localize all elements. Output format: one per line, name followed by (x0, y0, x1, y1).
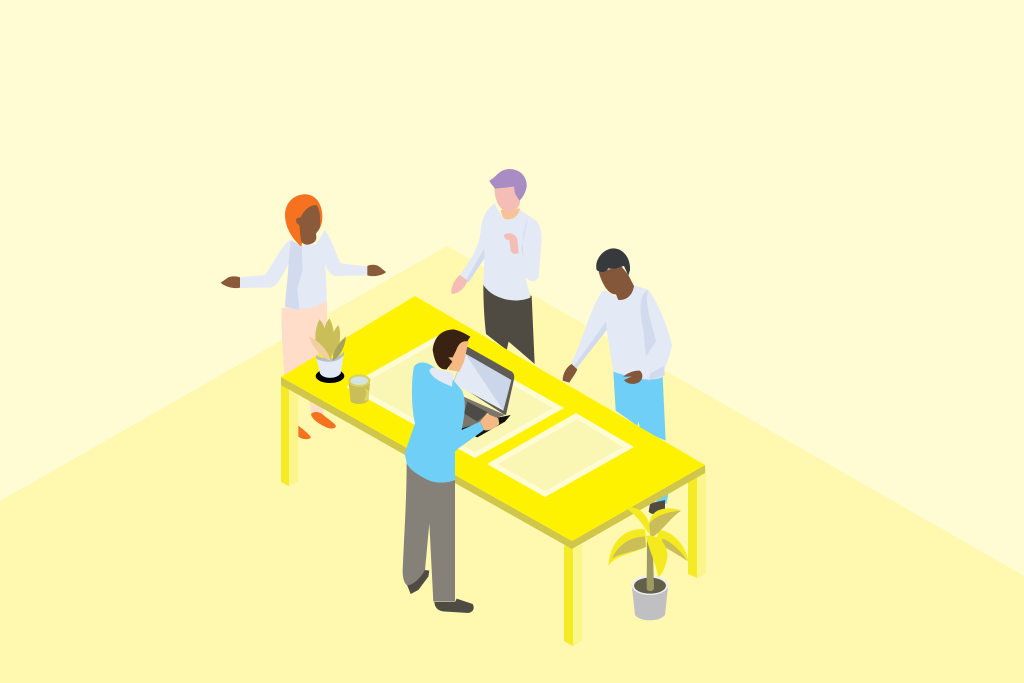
pot rim (632, 575, 668, 595)
laptop keyboard (464, 402, 488, 422)
dark hair man shirt (571, 285, 672, 379)
dark hair man shoe under table (649, 493, 668, 514)
laptop screen (453, 353, 511, 411)
face (447, 341, 469, 372)
black coaster (316, 369, 344, 383)
trousers (403, 462, 455, 602)
pot rim (316, 352, 344, 362)
dark hair man trousers (613, 372, 666, 441)
upper right leaf (649, 509, 681, 538)
front leaf (646, 536, 667, 577)
screen highlight (453, 353, 503, 411)
woman trousers (282, 300, 327, 427)
shoe (649, 500, 665, 514)
back shoe (407, 570, 429, 594)
pink leaf (309, 337, 331, 361)
left leaf (608, 529, 647, 566)
purple hair man neck (501, 208, 520, 219)
person: man with purple hair (451, 169, 541, 364)
laptop base (462, 397, 505, 428)
purple hair man shirt (460, 203, 541, 300)
cup body (348, 378, 370, 404)
person: man with laptop in blue shirt (403, 329, 514, 613)
left paper mat (346, 336, 564, 458)
upper left leaf (625, 507, 652, 537)
cup water (351, 376, 368, 385)
dark hair man face (599, 267, 634, 300)
left table leg (281, 380, 298, 486)
table top (281, 296, 705, 549)
purple hair man face (494, 187, 520, 212)
purple hair man trousers (483, 284, 535, 364)
hand on keyboard (480, 413, 499, 430)
right table leg (688, 468, 706, 578)
left mat border (346, 336, 564, 458)
pot body (632, 584, 668, 620)
cup rim (348, 374, 370, 387)
dark hair man shirt shading (574, 290, 665, 381)
right mat border (487, 413, 634, 497)
floor (0, 246, 1024, 683)
white pot (316, 353, 344, 378)
laptop black shadow (460, 415, 511, 437)
right leaf (657, 530, 688, 562)
woman feet (298, 412, 336, 439)
cup on table (348, 374, 370, 404)
purple hair man hands (451, 233, 519, 294)
purple hair man shirt shading (466, 221, 527, 283)
dark hair man hair (596, 248, 630, 276)
cup handle (364, 388, 369, 401)
woman arms and torso (239, 230, 367, 309)
laptop lid (453, 347, 514, 415)
soil (634, 578, 666, 594)
person: woman with orange hair (221, 194, 386, 439)
right mat fill (498, 419, 623, 491)
hair (433, 329, 470, 369)
woman shirt shading (285, 240, 303, 310)
table legs (281, 380, 706, 646)
dark hair man hands (563, 364, 642, 384)
blue shirt (405, 363, 484, 483)
woman hands (221, 265, 386, 288)
stem (647, 540, 654, 591)
right paper mat (487, 413, 634, 497)
table surface (281, 296, 705, 541)
woman hair (285, 194, 322, 247)
table edge (281, 377, 705, 549)
purple hair (489, 169, 527, 201)
woman face (296, 205, 320, 245)
person: man with dark hair (563, 248, 672, 441)
front shoe (434, 599, 474, 613)
white collar (429, 368, 453, 387)
dark leaves (315, 318, 340, 361)
floor plant in grey pot (608, 507, 688, 620)
front table leg (564, 545, 582, 646)
left mat fill (357, 342, 553, 452)
table plant in white pot (309, 318, 346, 383)
trouser cuff (656, 493, 668, 505)
side leaf (333, 337, 346, 361)
